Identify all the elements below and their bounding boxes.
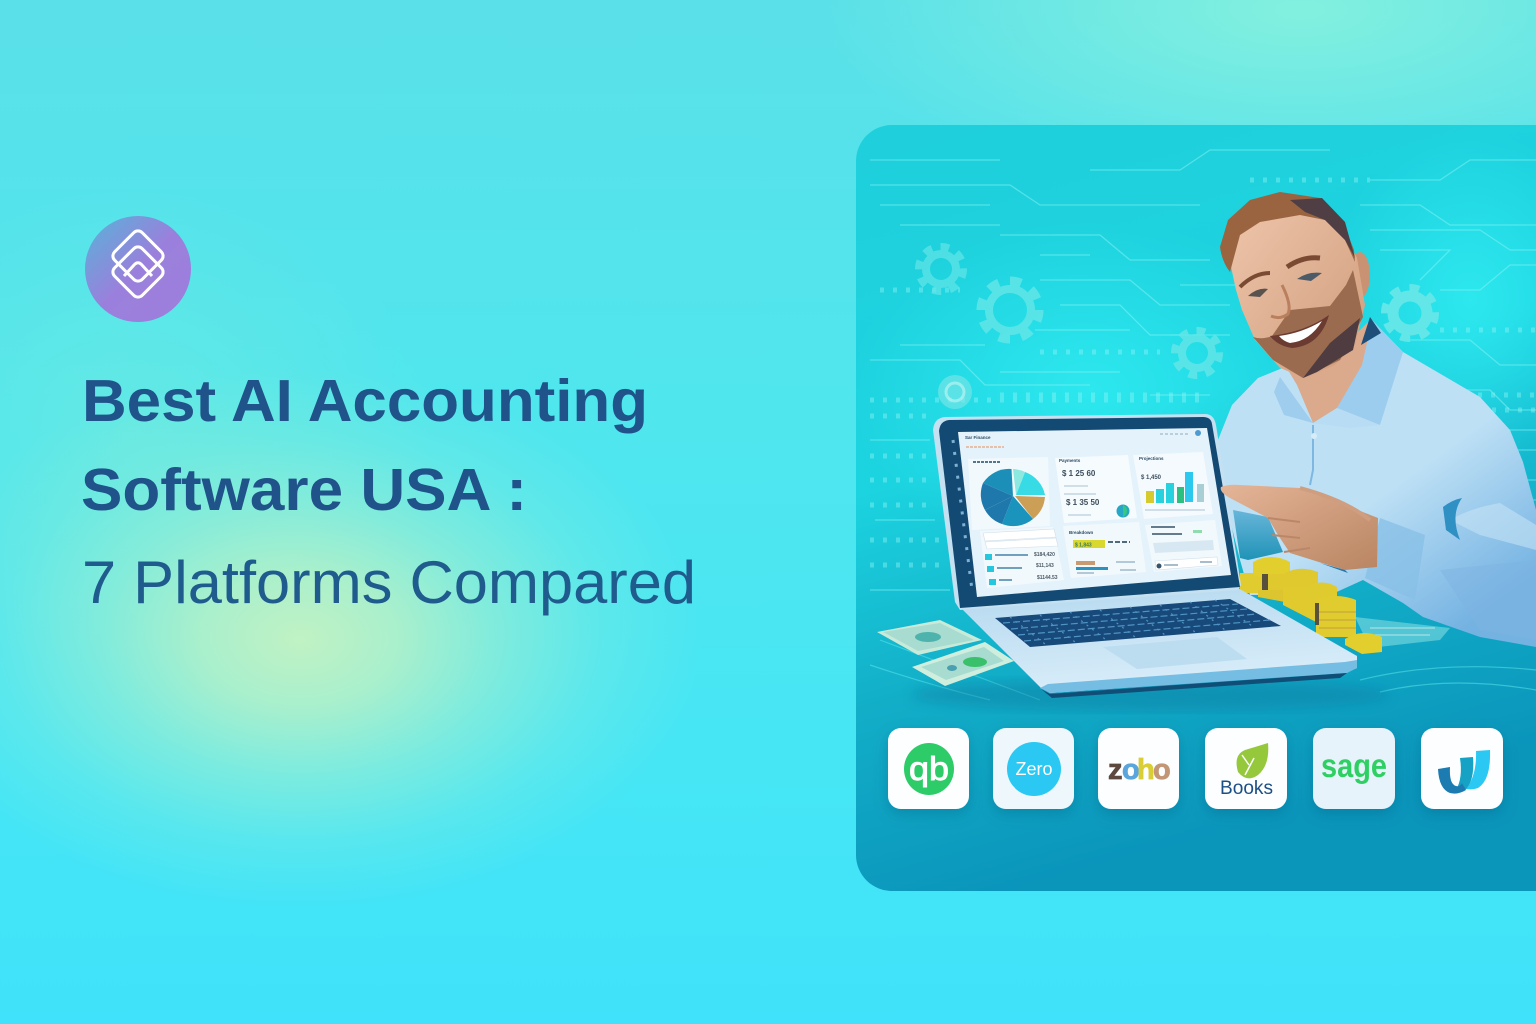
head [1220,192,1370,378]
logo: Wave [1421,728,1503,809]
title [81,368,648,523]
gear 3 [1175,331,1219,375]
face [1231,215,1365,372]
platform logos row [888,728,1503,809]
revenue card: $ 1 35 50 [1066,498,1100,507]
gear icons [919,247,1435,375]
gear 1 [919,247,963,291]
dollar bills left [877,620,1014,686]
screen header [965,430,1201,447]
activity card [1145,520,1222,572]
revenue card [1055,455,1137,523]
ear [1355,252,1370,296]
sidebar icons [953,440,972,590]
beard [1253,270,1363,378]
mouth [1270,315,1329,348]
bar chart card: $ 1,450 [1141,475,1162,481]
laptop base [960,588,1357,693]
subtitle: 7 Platforms Compared [82,549,696,616]
pointing hand [1221,485,1378,573]
keyboard [995,599,1281,647]
bar chart card [1133,452,1213,519]
cash flow card: Breakdown [1069,530,1094,535]
logo: Zoho: h [1137,754,1155,786]
pie chart card [968,457,1050,530]
collar [1274,377,1313,423]
logo: QuickBooks: qb [909,750,949,787]
logo: Zoho Books: Books [1220,778,1273,799]
revenue card: Payments [1059,458,1081,463]
shirt [1218,320,1536,647]
account rows card: $1144.53 [1037,575,1058,581]
account rows card [980,527,1064,588]
man [1218,192,1536,647]
gear 4 [1385,288,1435,338]
logo: Sage: sage [1321,747,1387,784]
dollar bills right [1355,617,1450,648]
trackpad [1103,637,1247,669]
nose [1271,285,1289,318]
logo: Zoho [1098,728,1179,809]
panel: product illustration [850,125,1536,891]
cash flow card [1063,522,1146,578]
account rows card: $184,420 [1034,552,1055,558]
title: Best AI Accounting [82,368,648,434]
account rows card: $11,143 [1036,563,1054,569]
logo: Zoho: o [1153,754,1171,786]
logo: QuickBooks [888,728,969,809]
screen header: Sar Finance [965,435,991,440]
screen bezel [933,414,1241,610]
logo: Xero: Zero [1015,759,1053,779]
logo: Zoho Books [1205,728,1287,809]
desk shadow band [910,679,1390,711]
eyes [1248,289,1268,297]
front coin [1345,633,1382,654]
logo badge [85,216,191,322]
title: Software USA : [81,457,527,523]
laptop [933,414,1357,698]
logo: Zoho: z [1108,754,1122,786]
cash flow card: $ 1,843 [1075,542,1092,548]
revenue card: $ 1 25 60 [1062,469,1096,478]
logo: Xero [993,728,1074,809]
circuit background [870,150,1536,590]
coin stacks [1240,557,1356,637]
logo: Zoho: o [1122,754,1140,786]
bar chart card: Projections [1139,456,1164,461]
hair [1220,192,1355,272]
shirt shading [1450,503,1536,550]
coin icon in background [938,375,972,409]
screen [958,428,1231,597]
neck [1289,322,1368,423]
logo: Sage [1313,728,1395,809]
gear 2 [981,281,1039,339]
